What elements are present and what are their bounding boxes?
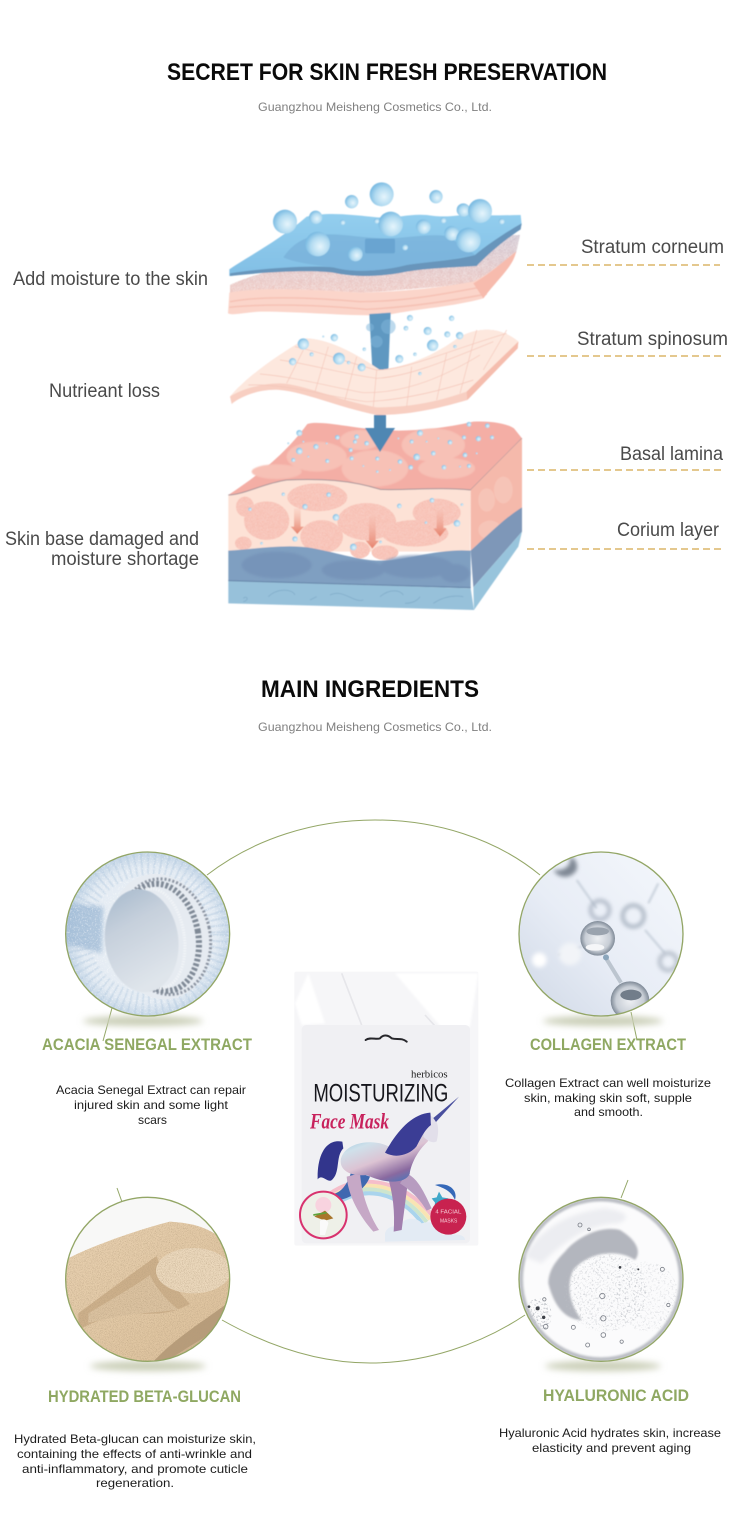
badge: 4 facial masks: MASKS	[440, 1219, 458, 1225]
upper skin layer: stratum corneum with bubbles	[228, 182, 522, 315]
product: moisturizing face mask package	[294, 972, 478, 1246]
middle skin layer: stratum spinosum with grid	[230, 315, 518, 415]
rainbow	[328, 1182, 433, 1225]
brand: herbicos: herbicos	[411, 1069, 448, 1080]
badge: 4 facial masks	[430, 1199, 466, 1235]
text: collagen description: and smooth.	[574, 1105, 643, 1119]
text: acacia description: Acacia Senegal Extract can repair	[56, 1083, 246, 1097]
heading: hyaluronic acid: HYALURONIC ACID	[543, 1387, 689, 1405]
subtitle: company name: Guangzhou Meisheng Cosmetics Co., Ltd.	[258, 100, 492, 114]
text: acacia description: injured skin and some light	[74, 1098, 229, 1112]
circle shadows	[83, 1016, 663, 1371]
label: skin base damaged and moisture shortage	[5, 529, 199, 570]
lower skin block: basal lamina and corium	[228, 421, 522, 610]
connector column between layers	[369, 313, 391, 372]
text: hyaluronic acid description: Hyaluronic Acid hydrates skin, increase	[499, 1426, 721, 1440]
foil card	[302, 1025, 470, 1243]
ingredient photo: collagen	[518, 850, 685, 1020]
text: hyaluronic acid description: elasticity and prevent aging	[532, 1441, 691, 1455]
cloud	[385, 1219, 465, 1242]
label: skin base damaged and moisture shortage: moisture shortage	[51, 549, 199, 570]
moon and star	[435, 1184, 456, 1200]
label: corium layer: Corium layer	[617, 520, 720, 541]
badge: 4 facial masks: 4 FACIAL	[435, 1209, 461, 1215]
label: skin base damaged and moisture shortage: Skin base damaged and	[5, 529, 199, 550]
text: collagen description: skin, making skin soft, supple	[524, 1091, 692, 1105]
skin layer diagram	[228, 182, 522, 610]
script: face mask: Face Mask	[309, 1108, 389, 1133]
inset circle: mask photo	[300, 1192, 347, 1238]
text: beta-glucan description	[14, 1432, 256, 1490]
label: nutrieant loss: Nutrieant loss	[49, 381, 160, 402]
label: stratum corneum: Stratum corneum	[581, 237, 724, 258]
heading: collagen extract: COLLAGEN EXTRACT	[530, 1036, 686, 1054]
ingredient photo: beta-glucan powder	[63, 1197, 233, 1363]
connecting ring lines	[103, 820, 637, 1363]
text: collagen description	[505, 1076, 711, 1119]
text: hyaluronic acid description	[499, 1426, 721, 1455]
arrow: down into lower skin block	[365, 415, 395, 452]
product name: MOISTURIZING	[313, 1081, 448, 1108]
clear hanger bag	[294, 972, 478, 1246]
text: collagen description: Collagen Extract can well moisturize	[505, 1076, 711, 1090]
subtitle: company name: Guangzhou Meisheng Cosmetics Co., Ltd.	[258, 720, 492, 734]
ingredient photo: acacia senegal	[63, 850, 233, 1020]
label: stratum spinosum: Stratum spinosum	[577, 329, 728, 350]
text: beta-glucan description: containing the effects of anti-wrinkle and	[17, 1447, 252, 1461]
title: secret for skin fresh preservation: SECRET FOR SKIN FRESH PRESERVATION	[167, 59, 607, 86]
hang hole	[366, 1035, 407, 1042]
text: acacia description	[56, 1083, 246, 1127]
text: acacia description: scars	[138, 1113, 167, 1127]
unicorn	[318, 1097, 459, 1232]
text: beta-glucan description: regeneration.	[96, 1476, 174, 1490]
label: add moisture to the skin: Add moisture to the skin	[13, 269, 208, 290]
text: beta-glucan description: Hydrated Beta-glucan can moisturize skin,	[14, 1432, 256, 1446]
ingredient photo: hyaluronic acid	[518, 1197, 685, 1363]
heading: hydrated beta-glucan: HYDRATED BETA-GLUCAN	[48, 1388, 241, 1406]
label: basal lamina: Basal lamina	[620, 444, 723, 465]
text: beta-glucan description: anti-inflammatory, and promote cuticle	[22, 1462, 248, 1476]
heading: acacia senegal extract: ACACIA SENEGAL EXTRACT	[42, 1036, 252, 1054]
title: main ingredients: MAIN INGREDIENTS	[261, 676, 479, 703]
